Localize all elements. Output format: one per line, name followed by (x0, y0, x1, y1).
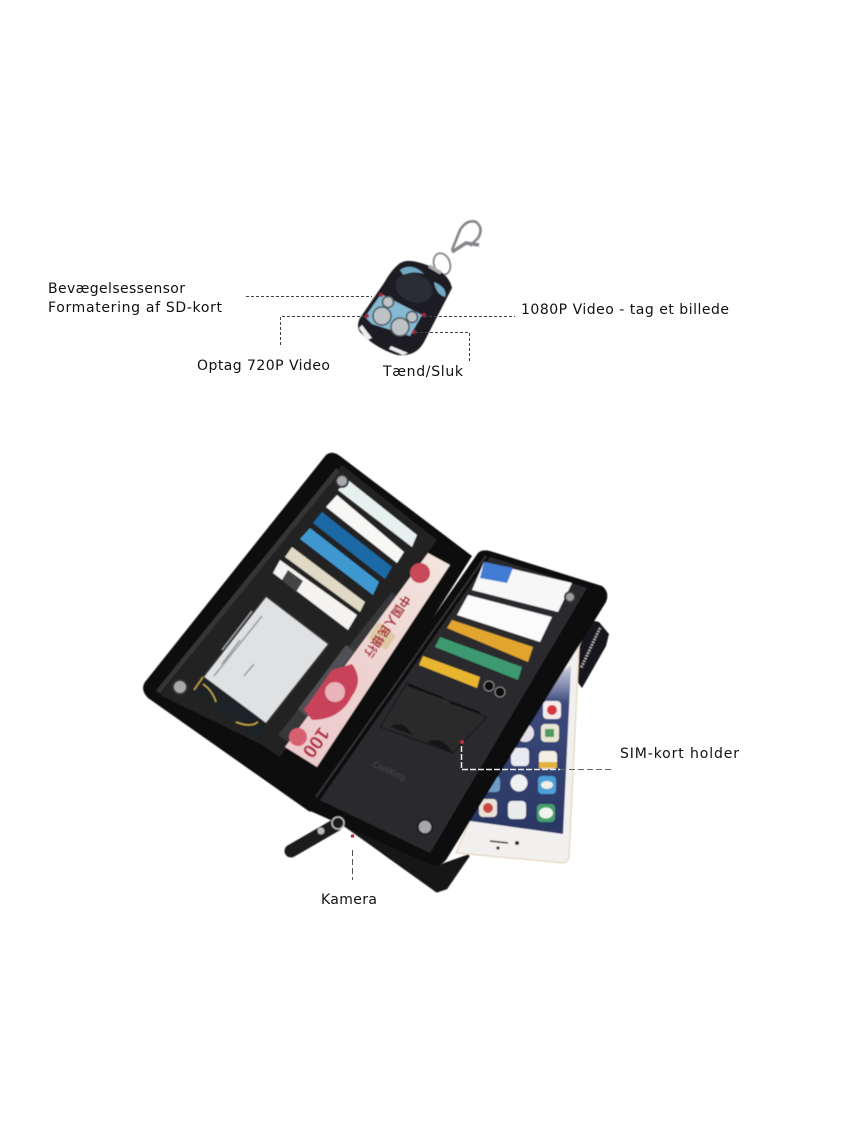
remote metal attachment (429, 266, 441, 273)
phone speaker and camera (490, 841, 519, 850)
label: camera: Kamera (321, 892, 377, 908)
flap cards (419, 562, 572, 697)
snap buttons (173, 680, 187, 694)
label: 1080P video: 1080P Video - tag et billede (521, 302, 729, 318)
left wallet panel (143, 453, 472, 812)
flap inner leather (320, 557, 587, 853)
flap outer (305, 550, 607, 865)
camera marker and leader (351, 834, 354, 880)
remote control key fob (358, 221, 481, 355)
remote chrome corners (359, 325, 372, 340)
panel outer leather (143, 453, 472, 812)
label: 720P video: Optag 720P Video (197, 358, 330, 374)
phone (456, 648, 579, 863)
red marker dots (365, 293, 426, 334)
remote body (358, 261, 452, 355)
QR code (282, 570, 303, 592)
right wallet flap (305, 550, 607, 865)
label: motion sensor and SD format (48, 281, 222, 316)
phone body (456, 648, 579, 863)
zipper pull (291, 817, 344, 851)
phone screen (470, 666, 571, 834)
lower back panel (320, 810, 468, 891)
phone app icons (479, 701, 561, 822)
label: SIM holder: SIM-kort holder (620, 746, 739, 762)
flap pockets (380, 683, 487, 753)
panel grey band beside banknote (278, 592, 400, 742)
banknote (285, 553, 450, 767)
ID window (192, 596, 329, 740)
label: motion sensor and SD format: Formatering af SD-kort (48, 300, 222, 316)
flap snap buttons (565, 592, 575, 602)
remote button panel (365, 294, 422, 336)
label: motion sensor and SD format: Bevægelsessensor (48, 281, 185, 297)
label: power: Tænd/Sluk (382, 364, 464, 380)
SIM holder marker and leader (460, 740, 611, 770)
banknote value: 100 (298, 723, 333, 761)
banknote seal (410, 563, 430, 583)
banknote portrait (304, 664, 358, 720)
banknote ornament (368, 622, 396, 650)
wallet photo (143, 453, 609, 891)
left panel cards (273, 480, 417, 630)
icon: key ring and clasp (431, 221, 481, 277)
panel grey highlight strip (298, 645, 354, 716)
remote buttons (373, 296, 418, 336)
remote top logo accents (400, 267, 424, 276)
leader lines for remote (246, 296, 515, 361)
banknote lower ornament (289, 728, 307, 746)
banknote text: 中国人民银行 (360, 592, 415, 661)
panel inner lining (160, 465, 437, 757)
zipper back section (570, 620, 609, 688)
flap logo: CoolKing (371, 760, 407, 783)
